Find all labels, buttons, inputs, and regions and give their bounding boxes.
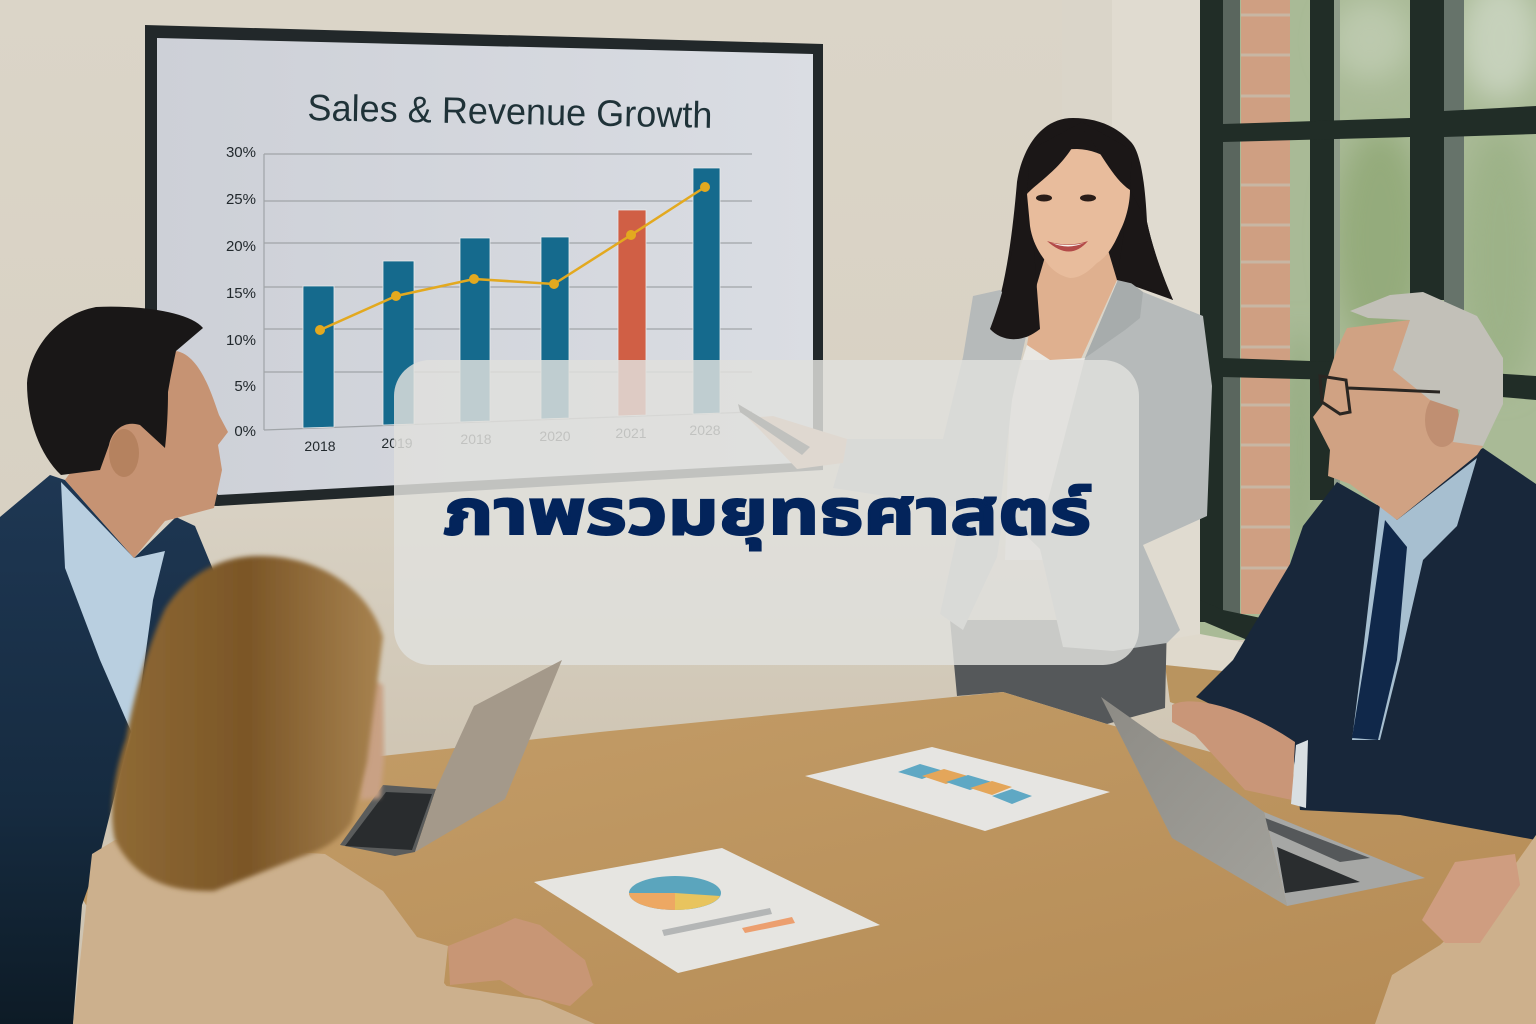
chart: 10% <box>226 332 256 349</box>
ear <box>109 429 139 477</box>
person's hands at right edge <box>1375 835 1536 1024</box>
back hair <box>990 118 1173 339</box>
woman in foreground <box>73 556 595 1024</box>
title: ภาพรวมยุทธศาสตร์ <box>443 468 1091 563</box>
trousers <box>950 620 1167 724</box>
ear <box>1425 393 1459 447</box>
suit <box>1196 448 1536 840</box>
document: pie chart <box>534 848 880 973</box>
document: bar chart <box>805 747 1110 831</box>
hair <box>112 556 383 891</box>
chart: 2021 <box>615 425 647 441</box>
title panel <box>394 360 1139 665</box>
chart: 5% <box>234 378 256 395</box>
shirt <box>61 482 165 738</box>
shirt <box>1352 458 1477 740</box>
chart: 0% <box>234 423 256 440</box>
glasses <box>1320 376 1440 414</box>
wall screen <box>145 25 823 506</box>
laptop: right <box>1101 697 1425 906</box>
chart <box>226 144 752 454</box>
hair <box>27 307 203 475</box>
chart: 2019 <box>381 435 413 451</box>
tie <box>1352 520 1407 740</box>
suit <box>0 475 214 1024</box>
neck and chest <box>1027 240 1117 365</box>
front hair locks <box>990 190 1040 339</box>
laptop: left <box>340 660 562 856</box>
brick wall outside <box>1241 0 1290 614</box>
pointing hand <box>748 416 847 469</box>
face <box>65 351 228 558</box>
chart: 2018 <box>460 431 492 447</box>
chart: 2018 <box>304 438 336 454</box>
face <box>1027 149 1130 278</box>
hands <box>1172 701 1295 800</box>
jacket <box>73 840 478 1024</box>
face <box>360 678 384 800</box>
presenter <box>738 118 1212 724</box>
man on right <box>1172 292 1536 840</box>
jacket <box>833 275 1212 651</box>
chart: 20% <box>226 238 256 255</box>
chart: 25% <box>226 191 256 208</box>
chart: 2020 <box>539 428 571 444</box>
face <box>1313 320 1483 520</box>
clicker <box>738 404 810 455</box>
window <box>1165 0 1536 748</box>
screen title: Sales & Revenue Growth <box>307 87 713 136</box>
chart: 2028 <box>689 422 721 438</box>
conference table <box>67 692 1536 1024</box>
chart: 15% <box>226 285 256 302</box>
cuff <box>1291 740 1308 808</box>
blouse <box>1005 345 1085 560</box>
man on left <box>0 307 228 1024</box>
hair <box>1350 292 1503 446</box>
chart: 30% <box>226 144 256 161</box>
clasped hands <box>448 918 593 1006</box>
